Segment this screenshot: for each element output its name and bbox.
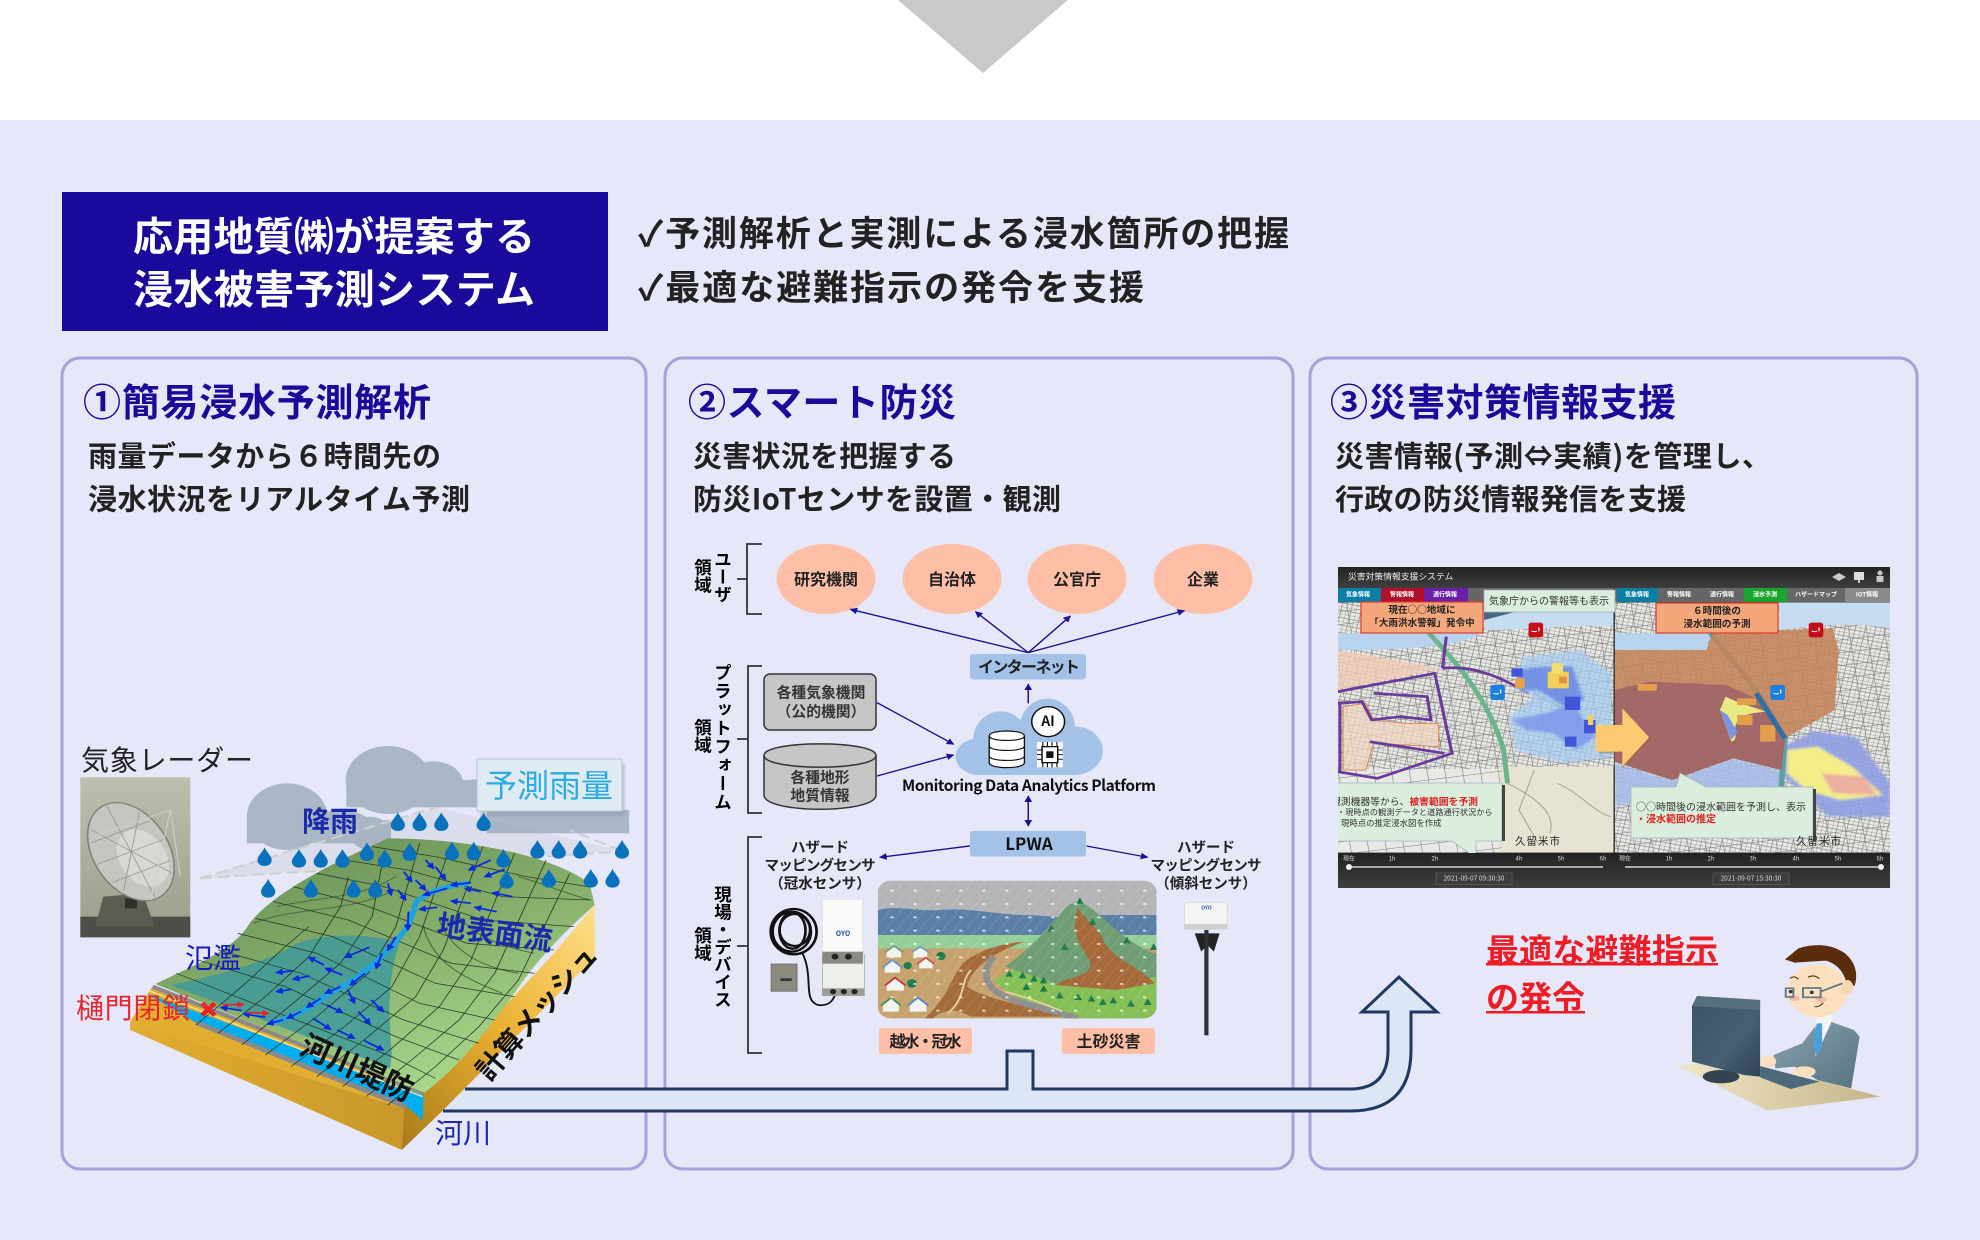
screen title: 災害対策情報支援システム (1348, 569, 1454, 582)
panel 1 heading: ①簡易浸水予測解析 (83, 372, 431, 427)
timeline right: 2021-09-07 15:30:30 (1721, 872, 1782, 882)
forecast overlay right: 浸水範囲の予測 (1683, 616, 1751, 630)
timeline left (1338, 853, 1614, 888)
JMA callout: 気象庁からの警報等も表示 (1489, 592, 1609, 607)
timeline right: 5h (1835, 853, 1842, 862)
layer labels and brackets: プラットフォーム (710, 664, 736, 812)
radar label: 気象レーダー (81, 739, 253, 779)
flood sensor: （冠水センサ） (769, 872, 871, 893)
system screenshot (1331, 567, 1890, 888)
database icon (989, 731, 1024, 768)
cloud platform (902, 699, 1156, 796)
river label: 河川 (435, 1112, 491, 1152)
rain radar overlay (1509, 650, 1613, 763)
tab row: 通行情報 (1710, 589, 1734, 598)
tilt sensor: OYO (1201, 904, 1212, 911)
timeline right: 1h (1666, 853, 1673, 862)
bottom callout right: ○○時間後の浸水範囲を予測し、表示 (1636, 798, 1806, 813)
warning overlay left (1361, 602, 1483, 633)
main stream (269, 883, 469, 1023)
panel 2 description (693, 433, 1061, 518)
bottom callout right (1631, 773, 1816, 841)
flood sensor: マッピングセンサ (764, 854, 876, 875)
predicted flood extent (1615, 628, 1839, 780)
bottom callout left: 現時点の推定浸水図を作成 (1341, 817, 1442, 829)
panel 1 description: 浸水状況をリアルタイム予測 (88, 476, 470, 518)
flooded area (170, 936, 400, 1068)
timeline right (1614, 853, 1890, 888)
bottom callout left: 観測機器等から、被害範囲を予測 (1331, 794, 1478, 808)
geology database cylinder (764, 744, 876, 809)
screen header icons (1832, 570, 1884, 583)
forecast rainfall label: 予測雨量 (485, 761, 613, 807)
timeline left: 1h (1389, 853, 1396, 862)
warning overlay left: 現在○○地域に (1388, 602, 1456, 616)
timeline left: 2h (1432, 853, 1439, 862)
panel 2 description: 災害状況を把握する (693, 433, 956, 475)
flood sensor: OYO (836, 929, 850, 939)
forecast overlay right: ６時間後の (1693, 603, 1741, 617)
layer labels and brackets: 領域 (690, 719, 716, 754)
user nodes (776, 544, 1252, 614)
tab row: 浸水予測 (1753, 589, 1777, 598)
tab row: 警報情報 (1390, 589, 1414, 598)
tab row (1338, 588, 1890, 602)
layer labels and brackets (690, 544, 762, 1053)
left map (1338, 602, 1614, 853)
disaster scene illustration (878, 881, 1158, 1018)
flow-down triangle (898, 0, 1068, 73)
user nodes: 研究機関 (794, 566, 858, 590)
panel 3 description (1335, 433, 1771, 518)
layer labels and brackets: 領域 (690, 559, 716, 594)
LPWA box: LPWA (1005, 830, 1053, 855)
platform name: Monitoring Data Analytics Platform (902, 774, 1156, 796)
data flow arrow (443, 977, 1437, 1111)
tilt sensor: ハザード (1177, 836, 1235, 857)
river (146, 993, 424, 1120)
panel 1: simple flood prediction (62, 358, 646, 1169)
user nodes: 企業 (1187, 566, 1219, 590)
forecast overlay right (1656, 603, 1778, 633)
key points: ✓予測解析と実測による浸水箇所の把握 (638, 206, 1289, 257)
panel 3 heading: ③災害対策情報支援 (1330, 372, 1676, 427)
internet box: インターネット (978, 653, 1080, 677)
sluice closure label: 樋門閉鎖 (76, 987, 190, 1027)
timeline right: 3h (1750, 853, 1757, 862)
landslide tag: 土砂災害 (1076, 1028, 1141, 1052)
radar photo (71, 777, 191, 937)
tab row: 通行情報 (1433, 589, 1457, 598)
key points (638, 206, 1289, 311)
block sides (130, 986, 426, 1108)
panel 2: smart disaster prevention (665, 358, 1293, 1169)
tilt sensor: （傾斜センサ） (1155, 872, 1257, 893)
terrain model (130, 746, 629, 1150)
mesh (176, 843, 592, 1105)
AI badge (1032, 707, 1065, 737)
JMA callout (1484, 590, 1615, 620)
place names (1515, 836, 1840, 846)
title block: 浸水被害予測システム (133, 258, 535, 316)
right map (1615, 602, 1890, 853)
evacuation instruction text (1486, 924, 1718, 1019)
radar beam (200, 807, 621, 878)
geology database cylinder: 地質情報 (790, 784, 850, 805)
contours (254, 877, 590, 993)
tab row: 警報情報 (1667, 589, 1691, 598)
flood sensor (764, 836, 876, 1005)
bottom callout left (1331, 783, 1505, 858)
place names: 久留米市 (1515, 833, 1561, 848)
tilt sensor (1150, 836, 1262, 1035)
panel 3: disaster response support (1310, 358, 1917, 1169)
bottom callout right: ・浸水範囲の推定 (1636, 810, 1716, 825)
meteorological agencies box (764, 674, 876, 730)
place names: 久留米市 (1796, 833, 1842, 848)
timeline left: 6h (1600, 853, 1607, 862)
meteorological agencies box: 各種気象機関 (777, 681, 865, 702)
timeline right: 4h (1793, 853, 1800, 862)
layer labels and brackets: 領域 (690, 927, 716, 962)
layer labels and brackets: 現場・デバイス (710, 886, 736, 1008)
overland flow label: 地表面流 (435, 902, 555, 960)
river levee label: 河川堤防 (294, 1021, 422, 1110)
title block: 応用地質㈱が提案する (133, 204, 535, 263)
timeline right: 現在 (1619, 853, 1631, 862)
tilt sensor: マッピングセンサ (1150, 854, 1262, 875)
rain drops (257, 812, 629, 898)
timeline right: 6h (1877, 853, 1884, 862)
warning overlay left: 「大雨洪水警報」発令中 (1369, 615, 1475, 629)
LPWA box (970, 830, 1086, 856)
overflow label: 氾濫 (185, 937, 241, 977)
timeline left: 現在 (1343, 853, 1355, 862)
rainfall label: 降雨 (302, 800, 358, 840)
key points: ✓最適な避難指示の発令を支援 (638, 260, 1144, 311)
sluice gate closure arrows (202, 1003, 269, 1015)
landslide tag (1062, 1028, 1155, 1054)
overflow tag: 越水・冠水 (890, 1028, 962, 1052)
layer labels and brackets: ユーザ (710, 551, 736, 603)
panel 2 heading: ②スマート防災 (688, 372, 956, 427)
evacuation instruction text: 最適な避難指示 (1486, 924, 1718, 972)
top bar (1338, 567, 1890, 588)
tab row: 気象情報 (1346, 589, 1370, 598)
bottom callout left: ・現時点の観測データと道路通行状況から (1337, 806, 1493, 818)
overland flow arrows (221, 860, 513, 1050)
map markers and orange arrow (1490, 588, 1824, 853)
land surface (155, 838, 595, 1093)
tab row: 気象情報 (1625, 589, 1649, 598)
meteorological agencies box: （公的機関） (777, 700, 865, 721)
user nodes: 自治体 (928, 566, 976, 590)
panel 1 description: 雨量データから６時間先の (88, 433, 441, 475)
timeline left: 2021-09-07 09:30:30 (1444, 872, 1505, 882)
user nodes: 公官庁 (1053, 566, 1101, 590)
timeline left: 5h (1558, 853, 1565, 862)
panel 3 description: 行政の防災情報発信を支援 (1335, 476, 1686, 518)
title block (62, 192, 608, 331)
panel 3 description: 災害情報(予測⇔実績)を管理し、 (1335, 433, 1771, 475)
chip icon (1037, 742, 1063, 767)
clouds (247, 746, 629, 850)
cloud platform: AI (1040, 711, 1055, 731)
network arrows (850, 609, 1184, 857)
icon: operator at computer (1676, 945, 1881, 1111)
timeline left: 4h (1516, 853, 1523, 862)
timeline right: 2h (1708, 853, 1715, 862)
flood sensor: ハザード (791, 836, 849, 857)
panel 2 description: 防災IoTセンサを設置・観測 (693, 476, 1061, 518)
computation mesh label: 計算メッシュ (466, 935, 606, 1088)
evacuation instruction text: の発令 (1486, 971, 1585, 1019)
tab row: IOT情報 (1856, 589, 1878, 598)
forecast rainfall label (477, 759, 625, 816)
panel 1 description (88, 433, 470, 518)
tab row: ハザードマップ (1795, 589, 1837, 598)
geology database cylinder: 各種地形 (790, 766, 850, 787)
